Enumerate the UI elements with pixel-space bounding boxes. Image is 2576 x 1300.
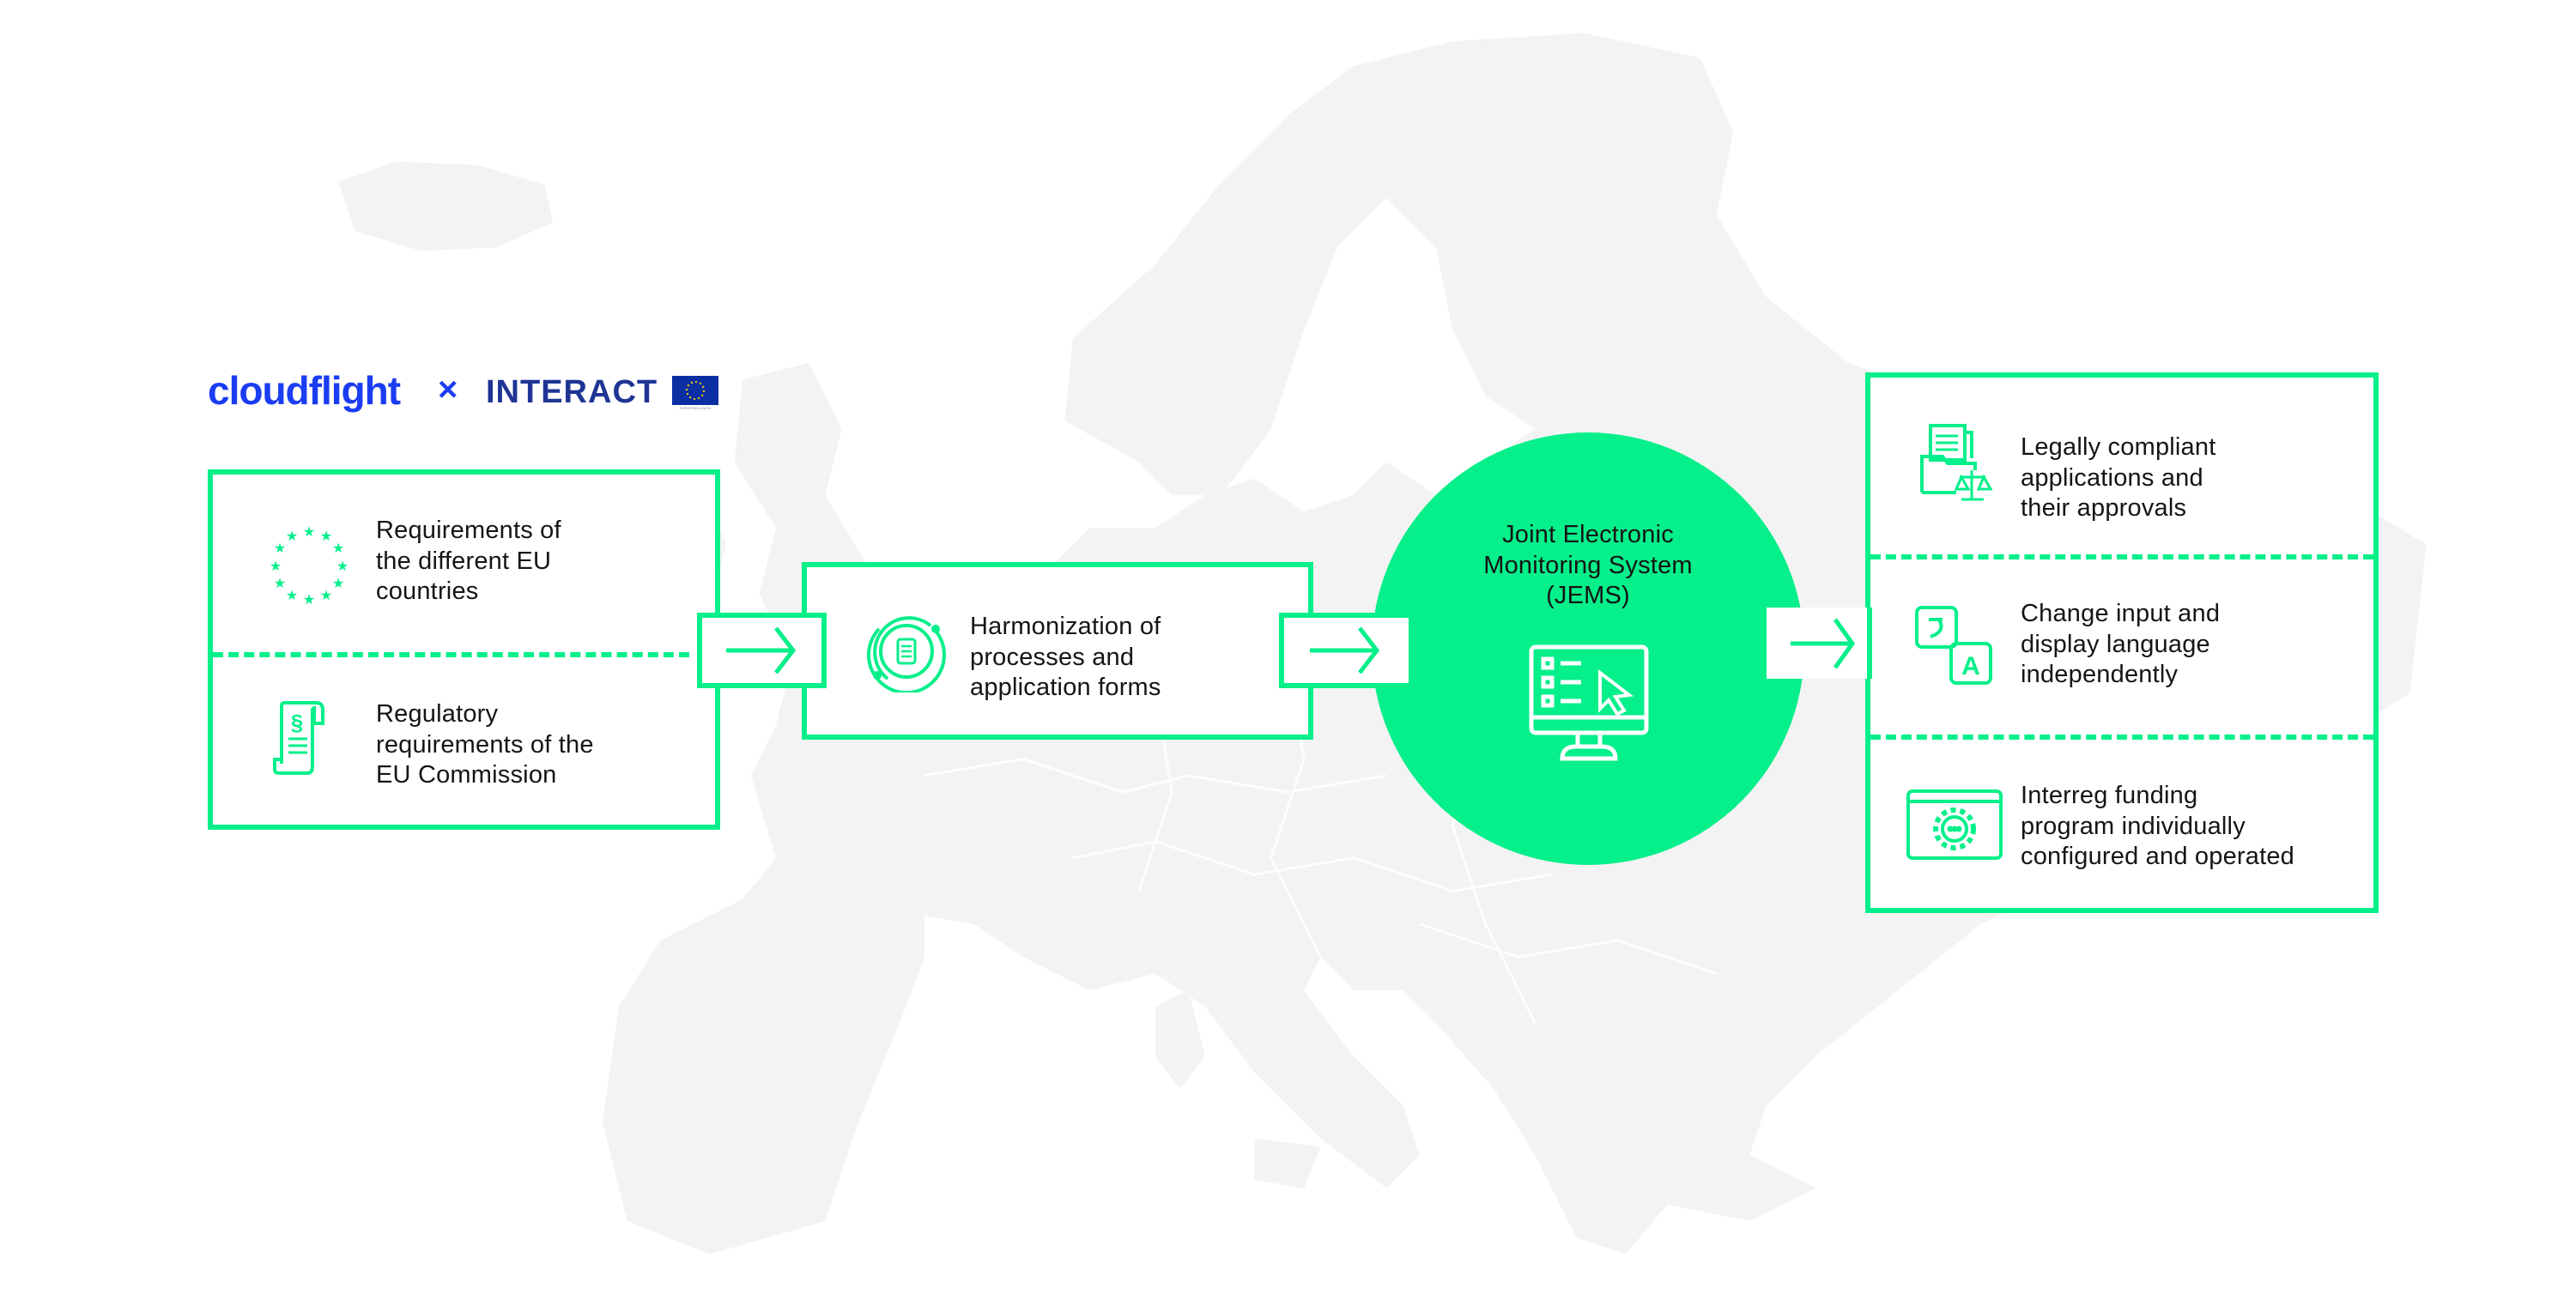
- icon: EU stars: ★: [332, 541, 344, 556]
- icon: EU stars: ★: [320, 529, 332, 544]
- text: change language: [2021, 600, 2220, 688]
- icon: EU stars: ★: [336, 559, 349, 574]
- panel: harmonization: [802, 562, 1313, 740]
- icon: monitor with checklist: [1530, 645, 1648, 760]
- icon: EU stars: ★: [274, 577, 286, 591]
- icon: EU stars: ★: [286, 589, 298, 603]
- text: regulatory requirements: Regulatory: [376, 700, 498, 728]
- icon: language switch: A: [1961, 652, 1980, 680]
- text: harmonization: application forms: [970, 674, 1161, 701]
- arrow: JEMS to outcomes: [1767, 608, 1872, 679]
- icon: browser with gear: [1906, 789, 2003, 860]
- icon: EU stars: ★: [320, 589, 332, 603]
- logo: cloudflight x INTERACT: ×: [438, 371, 458, 408]
- text: requirements of EU countries: [376, 517, 561, 605]
- icon: EU flag: EUROPEAN UNION: [680, 406, 711, 410]
- text: requirements of EU countries: countries: [376, 577, 478, 605]
- text: requirements of EU countries: the different EU: [376, 547, 551, 575]
- text: interreg funding: configured and operated: [2021, 843, 2294, 870]
- text: legally compliant: [2021, 433, 2216, 522]
- text: change language: display language: [2021, 630, 2210, 657]
- text: requirements of EU countries: Requirements of: [376, 517, 561, 544]
- text: JEMS title: [1483, 521, 1693, 609]
- text: regulatory requirements: [376, 700, 594, 789]
- text: change language: Change input and: [2021, 600, 2220, 627]
- icon: legal scroll: [273, 701, 324, 775]
- text: harmonization: processes and: [970, 644, 1134, 671]
- panel: EU requirements: [208, 469, 720, 830]
- icon: EU stars: ★: [274, 541, 286, 556]
- text: regulatory requirements: EU Commission: [376, 761, 556, 789]
- text: change language: independently: [2021, 661, 2178, 688]
- text: interreg funding: program individually: [2021, 812, 2246, 839]
- arrow: left panel to harmonization: [697, 613, 827, 688]
- panel: outcomes: [1865, 372, 2379, 913]
- icon: EU stars: ★: [270, 559, 282, 574]
- logo: cloudflight x INTERACT: INTERACT: [486, 374, 658, 410]
- icon: EU stars: ★: [303, 593, 315, 608]
- icon: EU stars: ★: [332, 577, 344, 591]
- text: harmonization: [970, 613, 1161, 701]
- arrow: harmonization to JEMS: [1279, 613, 1409, 688]
- icon: EU stars: ★: [286, 529, 298, 544]
- text: legally compliant: applications and: [2021, 463, 2203, 491]
- icon: EU stars: [270, 525, 349, 608]
- text: JEMS title: (JEMS): [1546, 582, 1630, 609]
- text: interreg funding: Interreg funding: [2021, 782, 2197, 809]
- text: harmonization: Harmonization of: [970, 613, 1161, 640]
- icon: EU flag: [672, 376, 718, 410]
- icon: harmonization cycle: [867, 616, 946, 692]
- text: JEMS title: Joint Electronic: [1502, 521, 1674, 548]
- text: regulatory requirements: requirements of the: [376, 731, 594, 759]
- text: legally compliant: Legally compliant: [2021, 433, 2215, 461]
- text: interreg funding: [2021, 782, 2294, 870]
- icon: legal scroll: §: [291, 710, 303, 735]
- text: JEMS title: Monitoring System: [1483, 551, 1693, 578]
- logo: cloudflight x INTERACT: cloudflight: [208, 368, 400, 413]
- icon: legal folder with scales: [1920, 424, 1993, 501]
- text: legally compliant: their approvals: [2021, 494, 2186, 522]
- icon: EU stars: ★: [303, 525, 315, 540]
- logo: cloudflight x INTERACT: [208, 368, 718, 413]
- icon: language switch: [1915, 606, 1992, 685]
- circle: JEMS: [1372, 432, 1804, 865]
